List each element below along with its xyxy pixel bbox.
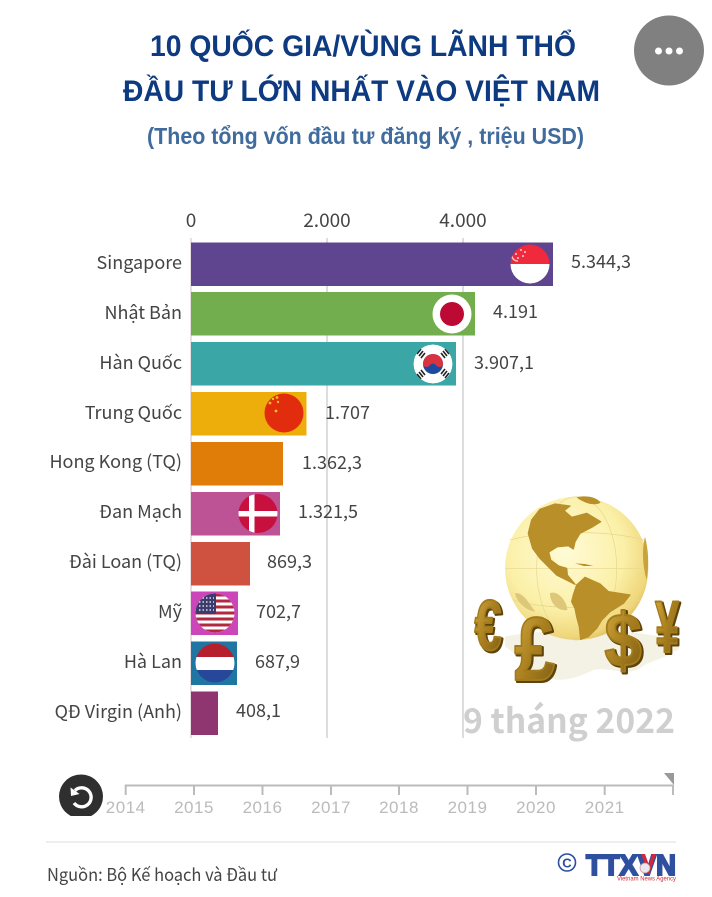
- icon: Singapore flag: [510, 244, 550, 284]
- row: Singapore: Singapore: [97, 249, 182, 275]
- bar chart: [49, 242, 631, 735]
- timeline: 2018: [379, 798, 419, 817]
- row: QĐ Virgin (Anh): 408,1: [236, 697, 281, 723]
- currency symbols: [474, 586, 681, 701]
- x axis labels: 2.000: [303, 206, 351, 233]
- row: Singapore: 5.344,3: [571, 248, 631, 274]
- row: Đài Loan (TQ): [69, 542, 312, 586]
- row: Nhật Bản: 4.191: [493, 298, 538, 324]
- currency symbols: ¥: [657, 587, 681, 669]
- icon: Japan flag: [432, 294, 472, 334]
- logo: TTXVN: Vietnam News Agency: [617, 876, 676, 882]
- row: Hàn Quốc: 3.907,1: [474, 349, 534, 375]
- icon: Korea flag: [414, 344, 452, 384]
- x axis labels: 4.000: [439, 206, 487, 233]
- subtitle: (Theo tổng vốn đầu tư đăng ký , triệu USD): [147, 123, 584, 149]
- row: Trung Quốc: [85, 392, 370, 436]
- row: Mỹ: 702,7: [256, 598, 301, 624]
- timeline: 2015: [174, 798, 214, 817]
- x axis labels: 0: [186, 206, 196, 233]
- icon: China flag: [264, 394, 304, 432]
- icon: Netherlands flag: [195, 643, 235, 684]
- currency symbols: £: [516, 601, 557, 701]
- title: [123, 29, 600, 108]
- currency symbols: ¥: [655, 586, 679, 668]
- row: Hàn Quốc: [99, 342, 534, 386]
- currency symbols: $: [604, 598, 642, 682]
- timeline: 2019: [448, 798, 487, 817]
- source: Nguồn: Bộ Kế hoạch và Đầu tư: [47, 862, 277, 887]
- timeline: 2017: [311, 798, 351, 817]
- timeline: 2020: [516, 798, 556, 817]
- timeline: [106, 773, 674, 817]
- row: Đan Mạch: 1.321,5: [298, 498, 358, 524]
- illustration: globe with currency symbols: [474, 496, 681, 701]
- title: ĐẦU TƯ LỚN NHẤT VÀO VIỆT NAM: [123, 74, 600, 108]
- icon: Denmark flag: [238, 494, 278, 534]
- row: Hà Lan: [124, 642, 300, 685]
- icon: replay button: [59, 774, 103, 818]
- title: 10 QUỐC GIA/VÙNG LÃNH THỔ: [150, 29, 576, 63]
- timeline: 2014: [106, 798, 146, 817]
- row: Đan Mạch: Đan Mạch: [99, 498, 182, 524]
- row: Nhật Bản: [104, 292, 538, 336]
- currency symbols: €: [474, 586, 502, 666]
- row: Hong Kong (TQ): 1.362,3: [302, 449, 362, 475]
- row: Hà Lan: 687,9: [255, 648, 300, 674]
- row: Nhật Bản: Nhật Bản: [104, 299, 182, 325]
- row: Hàn Quốc: Hàn Quốc: [99, 349, 182, 375]
- row: Đan Mạch: [99, 492, 358, 536]
- row: Singapore: [97, 242, 631, 286]
- icon: menu button: [634, 16, 704, 86]
- row: Hong Kong (TQ): Hong Kong (TQ): [49, 448, 182, 474]
- row: Mỹ: [158, 592, 301, 635]
- currency symbols: $: [606, 599, 643, 683]
- timeline: 2021: [585, 798, 625, 817]
- row: Mỹ: Mỹ: [158, 598, 183, 624]
- logo: TTXVN: TTXVN: [586, 850, 676, 882]
- row: QĐ Virgin (Anh): QĐ Virgin (Anh): [55, 698, 182, 724]
- row: Đài Loan (TQ): 869,3: [267, 548, 312, 574]
- period label: 9 tháng 2022: [463, 694, 675, 743]
- logo: TTXVN: C: [562, 856, 572, 870]
- row: QĐ Virgin (Anh): [55, 692, 281, 735]
- row: Đài Loan (TQ): Đài Loan (TQ): [69, 548, 182, 574]
- currency symbols: £: [514, 600, 555, 700]
- row: Hà Lan: Hà Lan: [124, 648, 182, 674]
- x axis labels: [186, 206, 487, 233]
- timeline: 2016: [243, 798, 282, 817]
- row: Trung Quốc: 1.707: [325, 399, 370, 425]
- icon: US flag: [195, 593, 235, 633]
- row: Hong Kong (TQ): [49, 442, 362, 486]
- currency symbols: €: [476, 587, 503, 667]
- row: Trung Quốc: Trung Quốc: [85, 399, 182, 425]
